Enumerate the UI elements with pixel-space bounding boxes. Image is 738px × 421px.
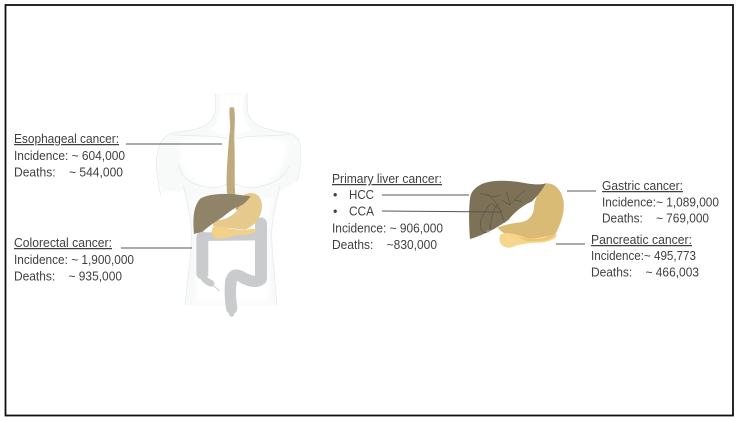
label: primary liver cancer: Primary liver cancer: xyxy=(332,172,442,186)
label: esophageal cancer xyxy=(14,132,125,180)
liver xyxy=(469,181,546,239)
leader lines xyxy=(121,144,596,248)
illustration: liver, stomach and pancreas detail xyxy=(469,181,564,248)
label: pancreatic cancer xyxy=(591,233,699,280)
label: gastric cancer: Gastric cancer: xyxy=(602,179,683,193)
label: gastric cancer: Deaths: ~ 769,000 xyxy=(602,212,709,226)
label: primary liver cancer: • xyxy=(333,204,337,218)
label: primary liver cancer: CCA xyxy=(349,204,375,218)
label: pancreatic cancer: Pancreatic cancer: xyxy=(591,233,692,247)
label: esophageal cancer: Deaths: ~ 544,000 xyxy=(14,166,123,180)
label: colorectal cancer: Incidence: ~ 1,900,000 xyxy=(14,253,134,267)
bile ducts and gallbladder xyxy=(480,190,525,233)
body silhouette xyxy=(157,93,301,305)
label: pancreatic cancer: Incidence:~ 495,773 xyxy=(591,249,696,263)
label: colorectal cancer: Deaths: ~ 935,000 xyxy=(14,270,122,284)
label: primary liver cancer: Deaths: ~830,000 xyxy=(332,238,437,252)
pancreas xyxy=(212,226,257,239)
label: primary liver cancer xyxy=(332,172,443,252)
label: esophageal cancer: Esophageal cancer: xyxy=(14,132,119,146)
pancreas xyxy=(499,233,557,248)
colon xyxy=(202,223,261,314)
liver xyxy=(193,194,251,234)
label: colorectal cancer: Colorectal cancer: xyxy=(14,236,112,250)
illustration: torso with digestive organs xyxy=(157,93,301,314)
stomach xyxy=(498,183,564,240)
label: gastric cancer xyxy=(602,179,719,226)
label: primary liver cancer: Incidence: ~ 906,000 xyxy=(332,222,443,236)
label: gastric cancer: Incidence:~ 1,089,000 xyxy=(602,196,719,210)
label: pancreatic cancer: Deaths: ~ 466,003 xyxy=(591,266,699,280)
label: colorectal cancer xyxy=(14,236,134,284)
label: esophageal cancer: Incidence: ~ 604,000 xyxy=(14,149,125,163)
label: primary liver cancer: HCC xyxy=(349,188,374,202)
stomach xyxy=(213,193,262,230)
label: primary liver cancer: • xyxy=(333,188,337,202)
esophagus xyxy=(227,107,247,211)
